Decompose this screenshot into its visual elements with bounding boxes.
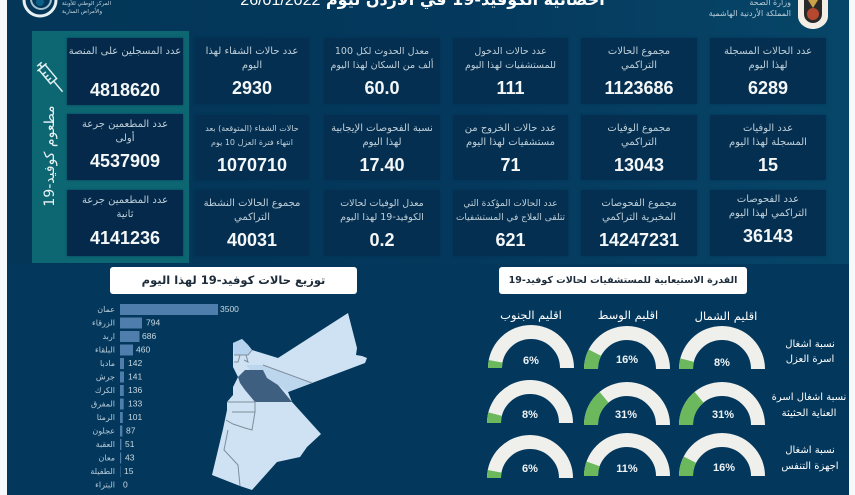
card: expected recoveries: انتهاء فترة العزل 10 يوم xyxy=(211,138,293,147)
card: positivity rate xyxy=(324,115,440,180)
card: death rate: الكوفيد-19 لهذا اليوم xyxy=(340,212,424,223)
row label: ICU beds: العناية الحثيثة xyxy=(782,408,836,419)
card: deaths today: عدد الوفيات xyxy=(743,123,793,134)
row label: isolation beds xyxy=(785,339,835,365)
card: positivity rate: نسبة الفحوصات الإيجابية xyxy=(331,123,433,134)
bar chart: cases by governorate: معان xyxy=(99,454,115,462)
icon: syringe xyxy=(36,62,64,92)
card: cumulative cases: التراكمي xyxy=(621,60,657,71)
card: expected recoveries xyxy=(195,115,309,180)
card: cumulative tests today xyxy=(710,190,826,256)
gauges: hospital occupancy: 16% xyxy=(616,354,638,366)
card: recoveries today: عدد حالات الشفاء لهذا xyxy=(206,46,298,57)
row label: isolation beds: اسرة العزل xyxy=(786,354,834,365)
card: hospital admissions: عدد حالات الدخول xyxy=(474,46,547,57)
card: active cases xyxy=(195,190,309,256)
heading: case distribution xyxy=(110,267,357,294)
logo caption: المركز الوطني للأوبئة xyxy=(62,1,111,7)
map: Jordan xyxy=(212,313,367,490)
card: hospital admissions: 111 xyxy=(496,78,525,98)
card: recoveries today: 2930 xyxy=(232,78,272,98)
bar chart: cases by governorate: 460 xyxy=(136,344,150,354)
card: first dose: عدد المطعمين جرعة xyxy=(82,119,168,130)
gauges: hospital occupancy: 6% xyxy=(522,463,538,475)
region label: north: اقليم الشمال xyxy=(695,309,757,323)
bar chart: cases by governorate: 43 xyxy=(125,452,135,462)
card: deaths today: 15 xyxy=(758,155,778,175)
bar chart: cases by governorate: المفرق xyxy=(91,400,115,408)
card: confirmed in hospital: 621 xyxy=(495,230,526,250)
row label: ventilators: نسبة اشغال xyxy=(785,445,835,456)
bar chart: cases by governorate: البتراء xyxy=(95,480,115,490)
gauges: hospital occupancy: 31% xyxy=(615,409,637,421)
ministry caption: المملكة الأردنية الهاشمية xyxy=(709,9,791,18)
gauge: central ICU 31% xyxy=(591,389,663,425)
gauges: hospital occupancy: 16% xyxy=(713,462,735,474)
bar chart: cases by governorate: 3500 xyxy=(220,304,239,314)
card: cumulative deaths xyxy=(581,115,697,180)
card: active cases: مجموع الحالات النشطة xyxy=(204,198,300,209)
heading: hospital capacity xyxy=(499,267,747,294)
card: second dose xyxy=(67,190,183,256)
bar chart: cases by governorate: 141 xyxy=(128,372,142,382)
card: incidence per 100k: ألف من السكان لهذا اليوم xyxy=(330,60,433,71)
card: cases today xyxy=(710,38,826,104)
card: cumulative tests today: عدد الفحوصات xyxy=(737,194,799,205)
row label: ICU beds: نسبة اشغال اسرة xyxy=(772,392,846,403)
bar chart: cases by governorate xyxy=(90,304,239,490)
card: cumulative deaths: 13043 xyxy=(614,155,664,175)
card: hospital admissions xyxy=(453,38,568,104)
card: cumulative cases xyxy=(581,38,697,104)
gauge: north ICU 31% xyxy=(686,389,758,425)
card: cumulative cases: 1123686 xyxy=(604,78,674,98)
row label: ventilators xyxy=(781,445,839,472)
card: hospital discharges: عدد حالات الخروج من xyxy=(465,123,556,134)
card: death rate: 0.2 xyxy=(369,230,395,250)
bar chart: cases by governorate: 686 xyxy=(142,331,156,341)
card: confirmed in hospital: عدد الحالات المؤكدة التي xyxy=(463,199,558,209)
bar chart: cases by governorate: الكرك xyxy=(95,386,115,395)
gauges: hospital occupancy: 8% xyxy=(714,357,730,369)
card: registered on platform: عدد المسجلين على المنصة xyxy=(69,46,181,57)
card: confirmed in hospital: تتلقى العلاج في المستشفيات xyxy=(456,213,565,223)
card: cumulative lab tests: مجموع الفحوصات xyxy=(601,198,677,209)
bar chart: cases by governorate: العقبة xyxy=(96,440,115,449)
card: incidence per 100k: معدل الحدوث لكل 100 xyxy=(335,46,429,57)
row label: isolation beds: نسبة اشغال xyxy=(785,339,835,350)
card: incidence per 100k: 60.0 xyxy=(364,78,400,98)
gauges: hospital occupancy: 8% xyxy=(522,409,538,421)
card: cumulative tests today: 36143 xyxy=(743,226,793,246)
heading: hospital capacity: القدرة الاستيعابية للمستشفيات لحالات كوفيد-19 xyxy=(509,275,737,286)
gauges: hospital occupancy: 11% xyxy=(616,463,638,475)
icon: ministry crest xyxy=(798,0,828,29)
card: cumulative deaths: التراكمي xyxy=(621,137,657,148)
bar chart: cases by governorate: 794 xyxy=(146,318,160,328)
card: registered on platform xyxy=(67,38,183,105)
card: active cases: التراكمي xyxy=(234,212,270,223)
panel: vaccination xyxy=(32,31,189,263)
ministry caption xyxy=(709,0,791,18)
gauge: central isolation 16% xyxy=(591,333,663,369)
card: recoveries today xyxy=(195,38,309,104)
card: hospital discharges: مستشفيات لهذا اليوم xyxy=(466,137,555,148)
bar chart: cases by governorate: 15 xyxy=(124,466,134,476)
card: cumulative lab tests: المخبرية التراكمي xyxy=(602,212,676,223)
card: cumulative cases: مجموع الحالات xyxy=(608,46,670,57)
card: death rate: معدل الوفيات لحالات xyxy=(340,198,424,209)
card: recoveries today: اليوم xyxy=(242,60,262,71)
card: cases today: عدد الحالات المسجلة xyxy=(724,46,812,57)
bar chart: cases by governorate: عمان xyxy=(97,305,115,314)
card: positivity rate: لهذا اليوم xyxy=(362,137,402,148)
card: first dose: 4537909 xyxy=(90,151,160,171)
card: cases today: لهذا اليوم xyxy=(748,60,788,71)
bar chart: cases by governorate: البلقاء xyxy=(95,346,115,354)
card: expected recoveries: حالات الشفاء (المتوقعة) بعد xyxy=(205,124,299,133)
logo caption xyxy=(62,0,111,15)
bar chart: cases by governorate: الطفيلة xyxy=(90,467,115,476)
gauges: hospital occupancy: 31% xyxy=(712,409,734,421)
logo caption: والأمراض السارية xyxy=(62,9,102,15)
region label: south: اقليم الجنوب xyxy=(500,308,562,322)
card: confirmed in hospital xyxy=(453,190,568,256)
bar chart: cases by governorate: 142 xyxy=(128,358,142,368)
card: hospital discharges xyxy=(453,115,568,180)
card: hospital discharges: 71 xyxy=(500,155,521,175)
card: cases today: 6289 xyxy=(748,78,788,98)
bar chart: cases by governorate: 136 xyxy=(128,385,142,395)
bar chart: cases by governorate: الرمثا xyxy=(97,413,115,422)
card: second dose: 4141236 xyxy=(90,228,160,248)
card: second dose: ثانية xyxy=(116,209,134,220)
row label: ventilators: اجهزة التنفس xyxy=(781,461,839,472)
bar chart: cases by governorate: 101 xyxy=(128,412,142,422)
bar chart: cases by governorate: مادبا xyxy=(100,359,115,368)
bar chart: cases by governorate: اربد xyxy=(102,332,115,341)
gauge: north ventilators 16% xyxy=(686,440,758,476)
bar chart: cases by governorate: 51 xyxy=(125,439,135,449)
card: cumulative deaths: مجموع الوفيات xyxy=(607,123,671,134)
heading: case distribution: توزيع حالات كوفيد-19 لهذا اليوم xyxy=(142,273,325,287)
bar chart: cases by governorate: عجلون xyxy=(92,426,115,436)
gauge: south ventilators 6% xyxy=(494,442,566,478)
card: incidence per 100k xyxy=(324,38,440,104)
gauge: south ICU 8% xyxy=(494,387,566,423)
bar chart: cases by governorate: 0 xyxy=(123,480,128,490)
bar chart: cases by governorate: جرش xyxy=(96,372,115,382)
card: positivity rate: 17.40 xyxy=(359,155,405,175)
card: expected recoveries: 1070710 xyxy=(217,155,287,175)
vaccination side label: مطعوم كوفيد-19 xyxy=(42,105,58,207)
card: hospital admissions: للمستشفيات لهذا اليوم xyxy=(465,60,556,71)
card: active cases: 40031 xyxy=(227,230,277,250)
gauges: hospital occupancy xyxy=(487,325,765,478)
bar chart: cases by governorate: 87 xyxy=(126,426,136,436)
card: registered on platform: 4818620 xyxy=(90,80,160,100)
card: cumulative lab tests: 14247231 xyxy=(599,230,679,250)
card: death rate xyxy=(324,190,440,256)
bar chart: cases by governorate: 133 xyxy=(128,398,142,408)
region label: central: اقليم الوسط xyxy=(598,308,658,322)
logo: national centre xyxy=(22,0,58,18)
card: cumulative tests today: التراكمي لهذا اليوم xyxy=(729,208,807,219)
card: first dose: أولى xyxy=(116,133,134,144)
card: first dose xyxy=(67,114,183,180)
gauge: central ventilators 11% xyxy=(591,440,663,476)
row label: ICU beds xyxy=(772,392,846,419)
gauges: hospital occupancy: 6% xyxy=(523,355,539,367)
gauge: north isolation 8% xyxy=(686,333,758,369)
card: second dose: عدد المطعمين جرعة xyxy=(82,195,168,206)
card: deaths today: المسجلة لهذا اليوم xyxy=(729,137,807,148)
card: cumulative lab tests xyxy=(581,190,697,256)
card: deaths today xyxy=(710,115,826,180)
gauge: south isolation 6% xyxy=(495,332,567,368)
bar chart: cases by governorate: الزرقاء xyxy=(92,318,115,328)
